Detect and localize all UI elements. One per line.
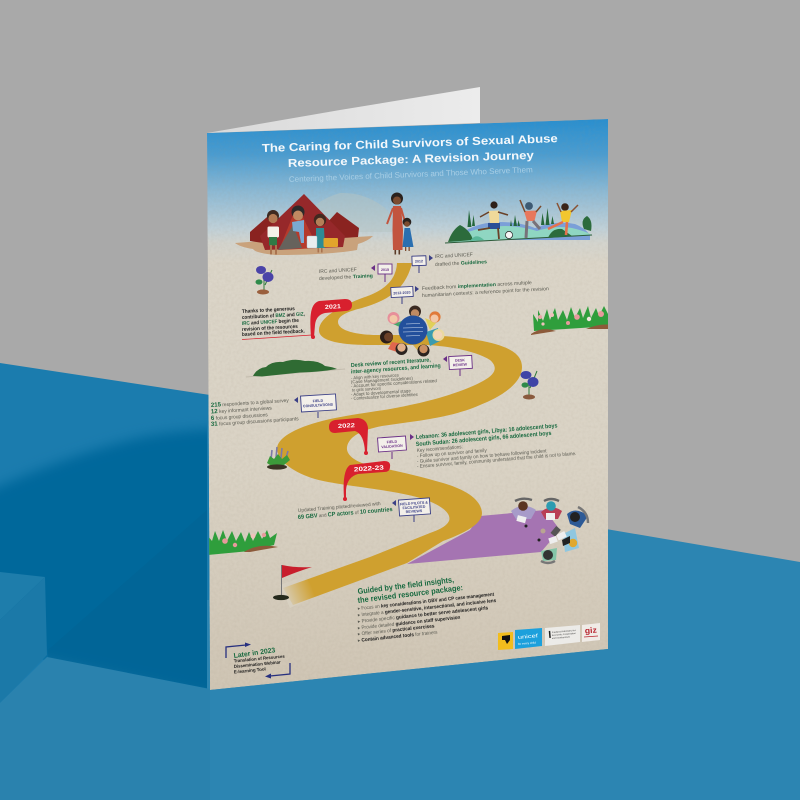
- field pilots sign: [392, 498, 431, 522]
- 2022 flag: 2022: [338, 423, 356, 430]
- person four: [556, 528, 579, 552]
- title: The Caring for Child Survivors of Sexual Abuse: [262, 133, 558, 155]
- illustration: mother and child: [387, 192, 414, 254]
- text: key recommendations: - Follow up on survivor and family: [417, 448, 487, 459]
- later list: [234, 654, 285, 674]
- desk review sign: [443, 355, 472, 376]
- bush: [246, 360, 345, 377]
- unicef logo: for every child: [518, 640, 536, 646]
- desk review sign: DESK: [455, 358, 465, 363]
- text: field consultation stats: [211, 397, 299, 428]
- text: thanks to donors: revision of the resources: [242, 324, 298, 333]
- winding road: [277, 263, 522, 605]
- boy: [267, 210, 279, 254]
- text: desk review bullets: to girls survivors: [352, 386, 382, 392]
- 2012-2020 sign: [391, 286, 419, 304]
- guided by heading: the revised resource package:: [357, 583, 463, 605]
- text: field consultation stats: 31 focus group discussions participants: [211, 415, 299, 428]
- finish flag: [273, 565, 312, 600]
- person two: [541, 499, 562, 520]
- German ministry logo: and Development: [552, 635, 571, 640]
- revised package bullets: ▸ Integrate a gender-sensitive, intersectional, and inclusive lens: [358, 598, 497, 618]
- unicef logo: [515, 628, 542, 649]
- text: key recommendations: - Guide survivor and family on how to behave following incident: [417, 448, 547, 465]
- later in 2023 block: [226, 642, 290, 678]
- circle of children with blue centre: [380, 306, 444, 356]
- text: desk review heading: inter-agency resources, and learning: [351, 363, 441, 375]
- arrow up-right: [226, 642, 251, 658]
- text: updated training: Updated Training piloted/reviewed with: [298, 501, 381, 514]
- text: feedback: Feedback from implementation across multiple: [422, 280, 532, 292]
- back cover of folded brochure: [207, 87, 480, 133]
- revised package bullets: ▸ Focus on key considerations in GBV and CP case management: [358, 592, 495, 612]
- German ministry logo: Economic Cooperation: [552, 632, 576, 637]
- title: Resource Package: A Revision Journey: [288, 150, 535, 170]
- field consultations sign: [294, 394, 336, 418]
- text: desk review bullets: [351, 374, 436, 400]
- person one: [511, 499, 536, 523]
- kid three: [548, 203, 578, 235]
- text: guidelines: IRC and UNICEF: [435, 252, 473, 260]
- giz logo: giz: [584, 625, 597, 635]
- person five: [541, 536, 558, 563]
- text: field validation numbers: South Sudan: 26 adolescent girls, 66 adolescent boys: [416, 431, 552, 448]
- field validation sign: FIELD: [387, 440, 398, 444]
- later list: E-learning Tool: [234, 666, 266, 674]
- text: training: IRC and UNICEF: [319, 267, 357, 275]
- title: [262, 134, 558, 167]
- text: guidelines: [435, 252, 487, 266]
- 2012 sign: [412, 255, 433, 273]
- yellow box: [324, 238, 338, 247]
- centre text lines: [403, 324, 423, 336]
- grass with pink flowers, left: [207, 530, 278, 555]
- 2021 flag: 2021: [325, 304, 342, 311]
- text: desk review bullets: - Align with key resources: [351, 372, 400, 380]
- text: desk review bullets: - Contextualize for diverse identities: [351, 392, 419, 401]
- German ministry logo: Federal Ministry for: [552, 629, 576, 634]
- flower left top: [256, 266, 274, 294]
- revised package bullets: ▸ Provide detailed guidance on staff supervision: [358, 615, 461, 631]
- 2022-23 flag: [343, 461, 390, 501]
- revised package bullets: ▸ Contain advanced tools for trainers: [358, 630, 438, 644]
- IRC logo: [498, 632, 513, 650]
- field validation sign: VALIDATION: [381, 444, 403, 449]
- text: desk review heading: Desk review of recent literature,: [351, 357, 431, 369]
- 2015 sign: 2015: [381, 268, 389, 272]
- 2021 flag: [310, 299, 352, 339]
- arrow down-left: [265, 663, 290, 678]
- 2022-23 flag: 2022-23: [354, 464, 385, 473]
- revised package bullets: ▸ Provide specific guidance to better serve adolescent girls: [358, 605, 489, 625]
- later heading: Later in 2023: [233, 647, 276, 660]
- text: thanks to donors: IRC and UNICEF begin the: [242, 318, 299, 327]
- later list: Translation of Resources: [234, 654, 285, 663]
- text: field consultation stats: 6 focus group discussions: [211, 411, 268, 422]
- text: desk review bullets: (Case Management Guidelines): [351, 376, 413, 384]
- person three: [567, 507, 588, 528]
- field pilots sign: FACILITATED: [402, 505, 426, 510]
- text: field consultation stats: 12 key informant interviews: [211, 404, 273, 415]
- text: feedback: [422, 280, 548, 297]
- text: feedback: humanitarian contexts: a reference point for the revision: [422, 286, 549, 299]
- man peeking from tent: [292, 206, 304, 243]
- text: key recommendations: - Ensure survivor, family, community understand that the child is not to blame.: [417, 451, 577, 470]
- 2022 flag: [329, 418, 368, 455]
- field validation sign: [378, 434, 414, 459]
- faint mountains: [315, 193, 392, 232]
- paper background: [207, 119, 608, 690]
- text: guidelines: drafted the Guidelines: [435, 259, 487, 268]
- infographic poster: [207, 119, 612, 690]
- revised package bullets: ▸ Offer series of practical exercises: [358, 623, 435, 637]
- text: desk review bullets: - Account for specific considerations related: [351, 378, 437, 388]
- text: updated training: 69 GBV and CP actors of 10 countries: [298, 507, 393, 521]
- text: thanks to donors: contribution of BMZ and GIZ,: [242, 311, 306, 321]
- desk review sign: REVIEW: [453, 363, 468, 367]
- 2012 sign: 2012: [415, 259, 423, 264]
- field pilots sign: REVIEWS: [406, 509, 423, 514]
- unicef logo: unicef: [518, 633, 539, 641]
- text: thanks to donors: Thanks to the generous: [242, 306, 295, 315]
- people around the table: [511, 499, 588, 563]
- field consultations sign: FIELD: [313, 399, 324, 403]
- soccer ball: [505, 231, 513, 239]
- field pilots sign: FIELD PILOTS &: [400, 501, 428, 506]
- text: training: developed the Training: [319, 273, 373, 282]
- illustration: refugee camp tents and family: [235, 194, 373, 255]
- girl: [314, 214, 326, 252]
- 2012-2020 sign: 2012-2020: [393, 291, 411, 295]
- logos: [498, 623, 600, 650]
- text: thanks to donors: [242, 306, 306, 338]
- text: training: [319, 268, 372, 280]
- red underline: [242, 335, 312, 340]
- text: key recommendations: Key recommendations:: [417, 444, 463, 454]
- kid two: [520, 200, 541, 238]
- illustration: children playing on hills: [445, 200, 592, 243]
- text: updated training: [298, 501, 393, 521]
- field consultations sign: CONSULTATIONS: [303, 403, 334, 408]
- guided by heading: Guided by the field insights,: [357, 575, 455, 596]
- purple meeting table area: [407, 510, 560, 564]
- text: field consultation stats: 215 respondents to a global survey: [211, 397, 289, 409]
- text: desk review bullets: - Adapt to developmental stage: [351, 388, 411, 397]
- German ministry logo: [545, 625, 580, 646]
- flower right: [520, 371, 538, 400]
- revised package bullets: [358, 592, 497, 644]
- later list: Dissemination Webinar: [234, 659, 281, 669]
- kid one: [478, 201, 508, 239]
- text: desk review heading: [351, 358, 440, 374]
- laptop: [550, 526, 561, 537]
- 2015 sign: [371, 264, 392, 282]
- subtitle: Centering the Voices of Child Survivors and Those Who Serve Them: [289, 165, 533, 184]
- grass with pink flowers, right: [531, 306, 612, 335]
- text: field validation numbers: Lebanon: 36 adolescent girls, Libya: 16 adolescent boys: [416, 423, 558, 441]
- jerrycan: [307, 236, 317, 248]
- plant left with lavender: [267, 447, 290, 470]
- text: thanks to donors: based on the field feedback.: [242, 328, 306, 338]
